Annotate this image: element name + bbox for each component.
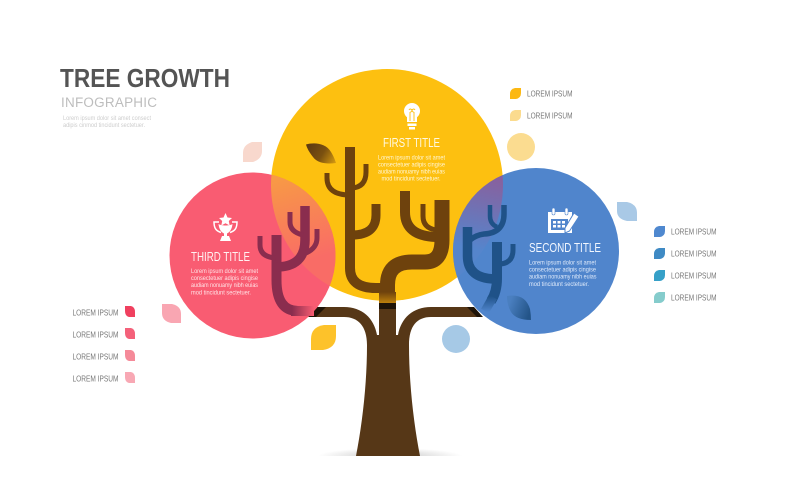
decorative leaf: pink	[162, 304, 181, 323]
decorative leaf: peach	[243, 142, 262, 162]
body text: first: audiam nonuamy nibh euias	[378, 168, 445, 176]
body text: second: audiam nonuamy nibh euias	[529, 274, 597, 280]
legend labels: pink: LOREM IPSUM	[72, 308, 118, 318]
heading: third title: THIRD TITLE	[191, 249, 250, 264]
legend labels: yellow: LOREM IPSUM	[527, 110, 572, 120]
legend labels: blue: LOREM IPSUM	[671, 248, 716, 258]
overlap with yellow circle	[453, 175, 503, 278]
legend labels: pink: LOREM IPSUM	[72, 330, 118, 340]
decorative circle: light yellow	[507, 133, 535, 161]
intro text: Lorem ipsum dolor sit amet consect	[63, 115, 151, 122]
body text: first	[378, 154, 445, 182]
panel: second title circle	[453, 168, 619, 334]
legend labels: blue	[671, 226, 716, 302]
heading: tree growth: TREE GROWTH	[60, 63, 230, 93]
trunk dark band	[379, 303, 396, 309]
yellow circle branches	[327, 147, 442, 292]
central stem fade	[379, 292, 396, 303]
title block	[60, 63, 230, 129]
blue circle branches	[468, 205, 513, 311]
body text: first: Lorem ipsum dolor sit amet	[378, 154, 445, 162]
decorative leaf: yellow	[311, 325, 336, 350]
legend labels: yellow	[527, 88, 572, 120]
subheading: infographic: INFOGRAPHIC	[61, 95, 157, 110]
legend swatches: blue	[654, 226, 665, 303]
ground shadow	[318, 448, 462, 464]
decorative circle: light blue	[442, 325, 470, 353]
body text: second: mod tincidunt sectetuer.	[529, 281, 589, 288]
body text: third	[191, 268, 258, 296]
body text: second	[529, 260, 597, 288]
body text: second: consectetuer adipis cingise	[529, 266, 596, 274]
body text: second: Lorem ipsum dolor sit amet	[529, 260, 596, 266]
body text: first: mod tincidunt sectetuer.	[382, 176, 441, 182]
legend swatches: yellow	[510, 88, 521, 121]
legend: third title	[72, 306, 135, 384]
tree trunk	[308, 303, 483, 456]
right branch shadow	[467, 307, 483, 317]
legend labels: pink: LOREM IPSUM	[72, 374, 118, 384]
mask below ground shadow	[300, 456, 480, 468]
legend: second title	[654, 226, 716, 303]
body text: third: consectetuer adipis cingise	[191, 275, 258, 282]
body text: third: audiam nonuamy nibh euias	[191, 282, 258, 289]
legend swatches: pink	[125, 306, 135, 383]
legend labels: blue: LOREM IPSUM	[671, 292, 716, 302]
heading: first title: FIRST TITLE	[383, 135, 440, 150]
panel: third title circle	[170, 172, 336, 338]
body text: third: Lorem ipsum dolor sit amet	[191, 268, 258, 275]
pink circle branches	[260, 206, 317, 311]
legend labels: blue: LOREM IPSUM	[671, 270, 716, 280]
legend labels: pink: LOREM IPSUM	[72, 352, 118, 362]
icon: light bulb	[404, 103, 420, 130]
legend labels: blue: LOREM IPSUM	[671, 226, 716, 236]
body text: first: consectetuer adipis cingise	[378, 162, 445, 168]
icon: trophy	[214, 213, 237, 241]
overlap with yellow circle	[271, 175, 336, 286]
dark leaf	[306, 143, 336, 163]
body text: third: mod tincidunt sectetuer.	[191, 290, 251, 296]
left branch shadow	[308, 307, 326, 317]
legend labels: pink	[72, 308, 118, 384]
legend: first title	[510, 88, 572, 121]
infographic canvas	[60, 68, 716, 456]
intro text	[63, 115, 151, 129]
icon: calendar and pencil	[548, 208, 579, 233]
decorative leaf: light blue	[617, 202, 637, 221]
panel: first title circle	[271, 69, 503, 303]
legend labels: yellow: LOREM IPSUM	[527, 88, 572, 98]
blue gradient leaf	[507, 296, 531, 320]
heading: second title: SECOND TITLE	[529, 240, 601, 255]
intro text: adipis cinmod tincidunt sectetuer.	[63, 122, 145, 129]
